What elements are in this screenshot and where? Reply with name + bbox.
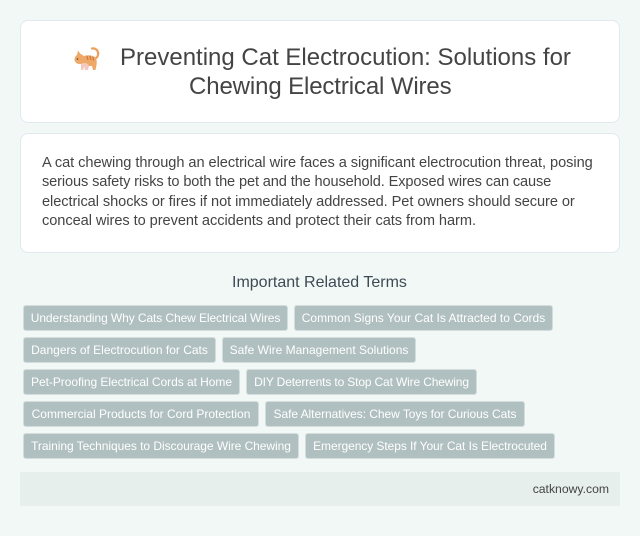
description text: A cat chewing through an electrical wire faces a significant electrocution threat, posing [42, 155, 593, 171]
tag: Safe Wire Management Solutions [230, 343, 408, 357]
description text [42, 155, 593, 229]
tag [23, 401, 259, 427]
tag [23, 433, 299, 459]
description text: conceal wires to prevent accidents and protect their cats from harm. [42, 213, 476, 229]
tag: Common Signs Your Cat Is Attracted to Cords [302, 311, 545, 325]
tag list [23, 305, 555, 459]
panel: description [20, 133, 620, 253]
panel: title card [20, 20, 620, 123]
tag [294, 305, 553, 331]
icon: cat [74, 47, 100, 70]
tag [265, 401, 525, 427]
tag: Dangers of Electrocution for Cats [31, 343, 208, 357]
heading: related terms: Important Related Terms [232, 274, 407, 291]
tag [23, 369, 240, 395]
tag: Commercial Products for Cord Protection [32, 407, 250, 421]
tag: Understanding Why Cats Chew Electrical Wires [31, 311, 280, 325]
tag [246, 369, 477, 395]
tag [305, 433, 555, 459]
description text: electrical shocks or fires if not immediately addressed. Pet owners should secure or [42, 194, 575, 210]
tag [222, 337, 416, 363]
tag: Training Techniques to Discourage Wire Chewing [31, 439, 291, 453]
title line 2: Chewing Electrical Wires [189, 73, 452, 100]
tag: DIY Deterrents to Stop Cat Wire Chewing [254, 375, 469, 389]
footer source: catknowy.com [533, 482, 609, 496]
title line 1: Preventing Cat Electrocution: Solutions for [120, 44, 571, 71]
tag: Pet-Proofing Electrical Cords at Home [31, 375, 232, 389]
footer bar [20, 472, 620, 506]
tag [23, 305, 288, 331]
tag: Safe Alternatives: Chew Toys for Curious Cats [274, 407, 516, 421]
description text: serious safety risks to both the pet and the household. Exposed wires can cause [42, 174, 551, 190]
tag: Emergency Steps If Your Cat Is Electrocuted [313, 439, 547, 453]
tag [23, 337, 216, 363]
